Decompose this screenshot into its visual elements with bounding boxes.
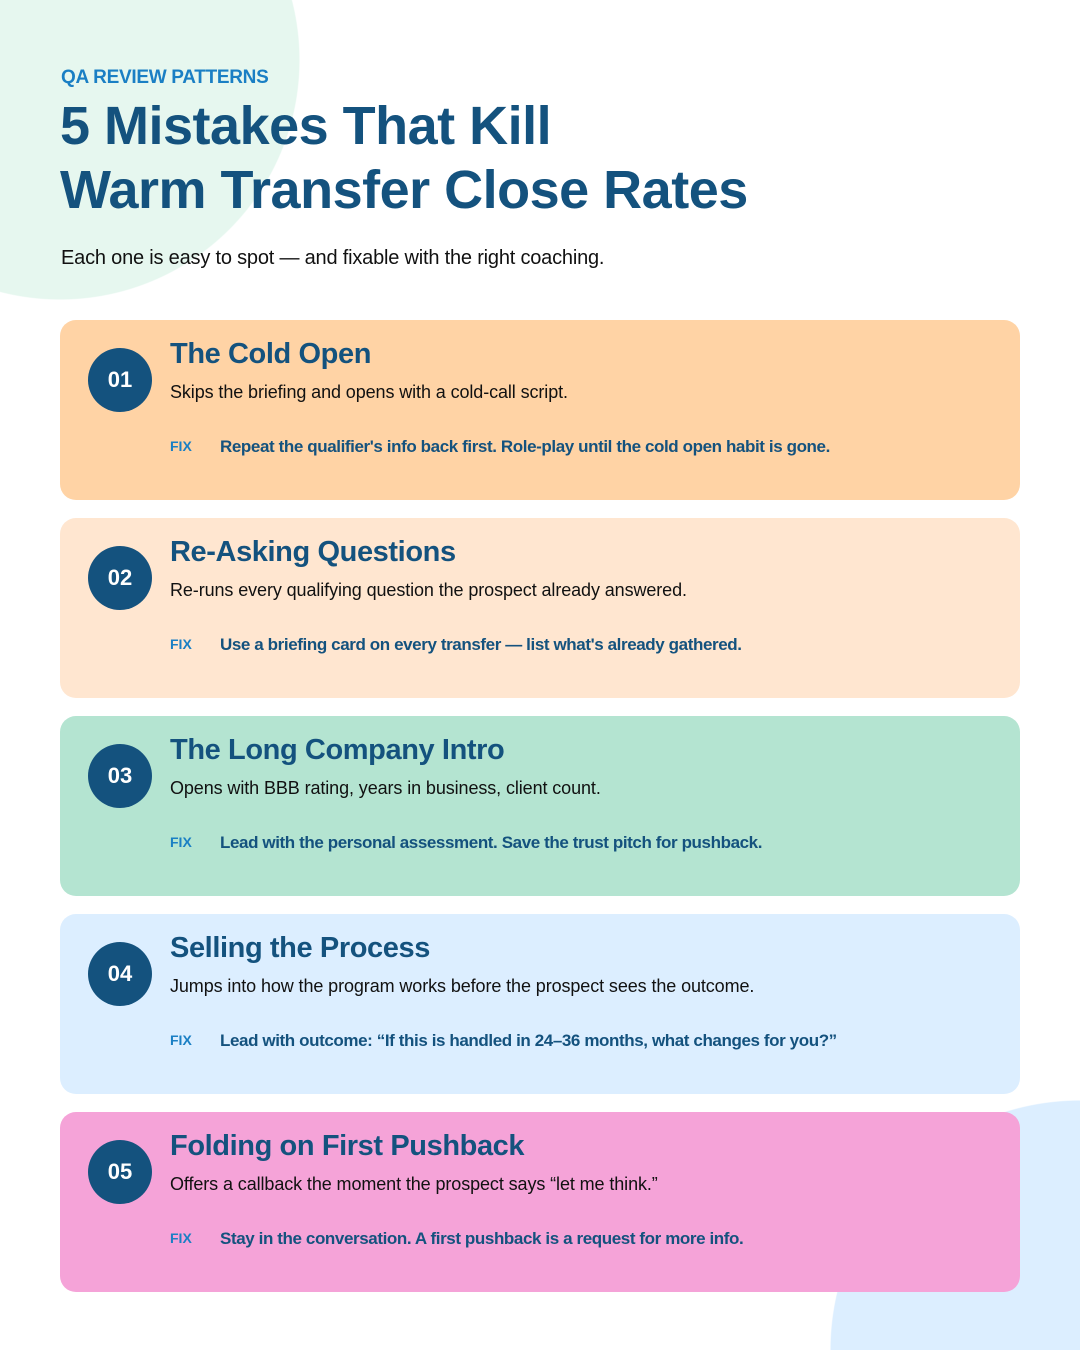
- badge 05: [88, 1140, 152, 1204]
- panel: 01: [60, 320, 1020, 500]
- fix text 04: Lead with outcome: “If this is handled in 24–36 months, what changes for you?”: [220, 1031, 837, 1050]
- description 03: Opens with BBB rating, years in business, client count.: [170, 778, 601, 798]
- heading 03: The Long Company Intro: [170, 734, 504, 766]
- heading 01: The Cold Open: [170, 338, 371, 370]
- fix text 05: Stay in the conversation. A first pushback is a request for more info.: [220, 1229, 743, 1248]
- fix label 03: FIX: [170, 834, 192, 850]
- fix label 04: FIX: [170, 1032, 192, 1048]
- fix text 01: Repeat the qualifier's info back first. Role-play until the cold open habit is gone.: [220, 437, 830, 456]
- fix label 05: FIX: [170, 1230, 192, 1246]
- panel: 05: [60, 1112, 1020, 1292]
- badge 04: 04: [108, 961, 132, 986]
- kicker: QA REVIEW PATTERNS: [61, 67, 268, 88]
- subtitle: Each one is easy to spot — and fixable with the right coaching.: [61, 247, 604, 269]
- title: Warm Transfer Close Rates: [60, 160, 748, 220]
- heading 05: Folding on First Pushback: [170, 1130, 524, 1162]
- panel: 02: [60, 518, 1020, 698]
- badge 03: 03: [108, 763, 132, 788]
- badge 01: [88, 348, 152, 412]
- title: 5 Mistakes That Kill: [60, 96, 551, 156]
- badge 04: [88, 942, 152, 1006]
- fix label 02: FIX: [170, 636, 192, 652]
- fix label 01: FIX: [170, 438, 192, 454]
- badge 01: 01: [108, 367, 132, 392]
- description 04: Jumps into how the program works before the prospect sees the outcome.: [170, 976, 754, 996]
- description 02: Re-runs every qualifying question the prospect already answered.: [170, 580, 687, 600]
- badge 02: [88, 546, 152, 610]
- title: [60, 96, 748, 220]
- badge 02: 02: [108, 565, 132, 590]
- description 05: Offers a callback the moment the prospect says “let me think.”: [170, 1174, 658, 1194]
- badge 05: 05: [108, 1159, 132, 1184]
- fix text 03: Lead with the personal assessment. Save the trust pitch for pushback.: [220, 833, 762, 852]
- panel: 03: [60, 716, 1020, 896]
- badge 03: [88, 744, 152, 808]
- heading 04: Selling the Process: [170, 932, 430, 964]
- heading 02: Re-Asking Questions: [170, 536, 456, 568]
- panel: 04: [60, 914, 1020, 1094]
- fix text 02: Use a briefing card on every transfer — list what's already gathered.: [220, 635, 742, 654]
- description 01: Skips the briefing and opens with a cold-call script.: [170, 382, 568, 402]
